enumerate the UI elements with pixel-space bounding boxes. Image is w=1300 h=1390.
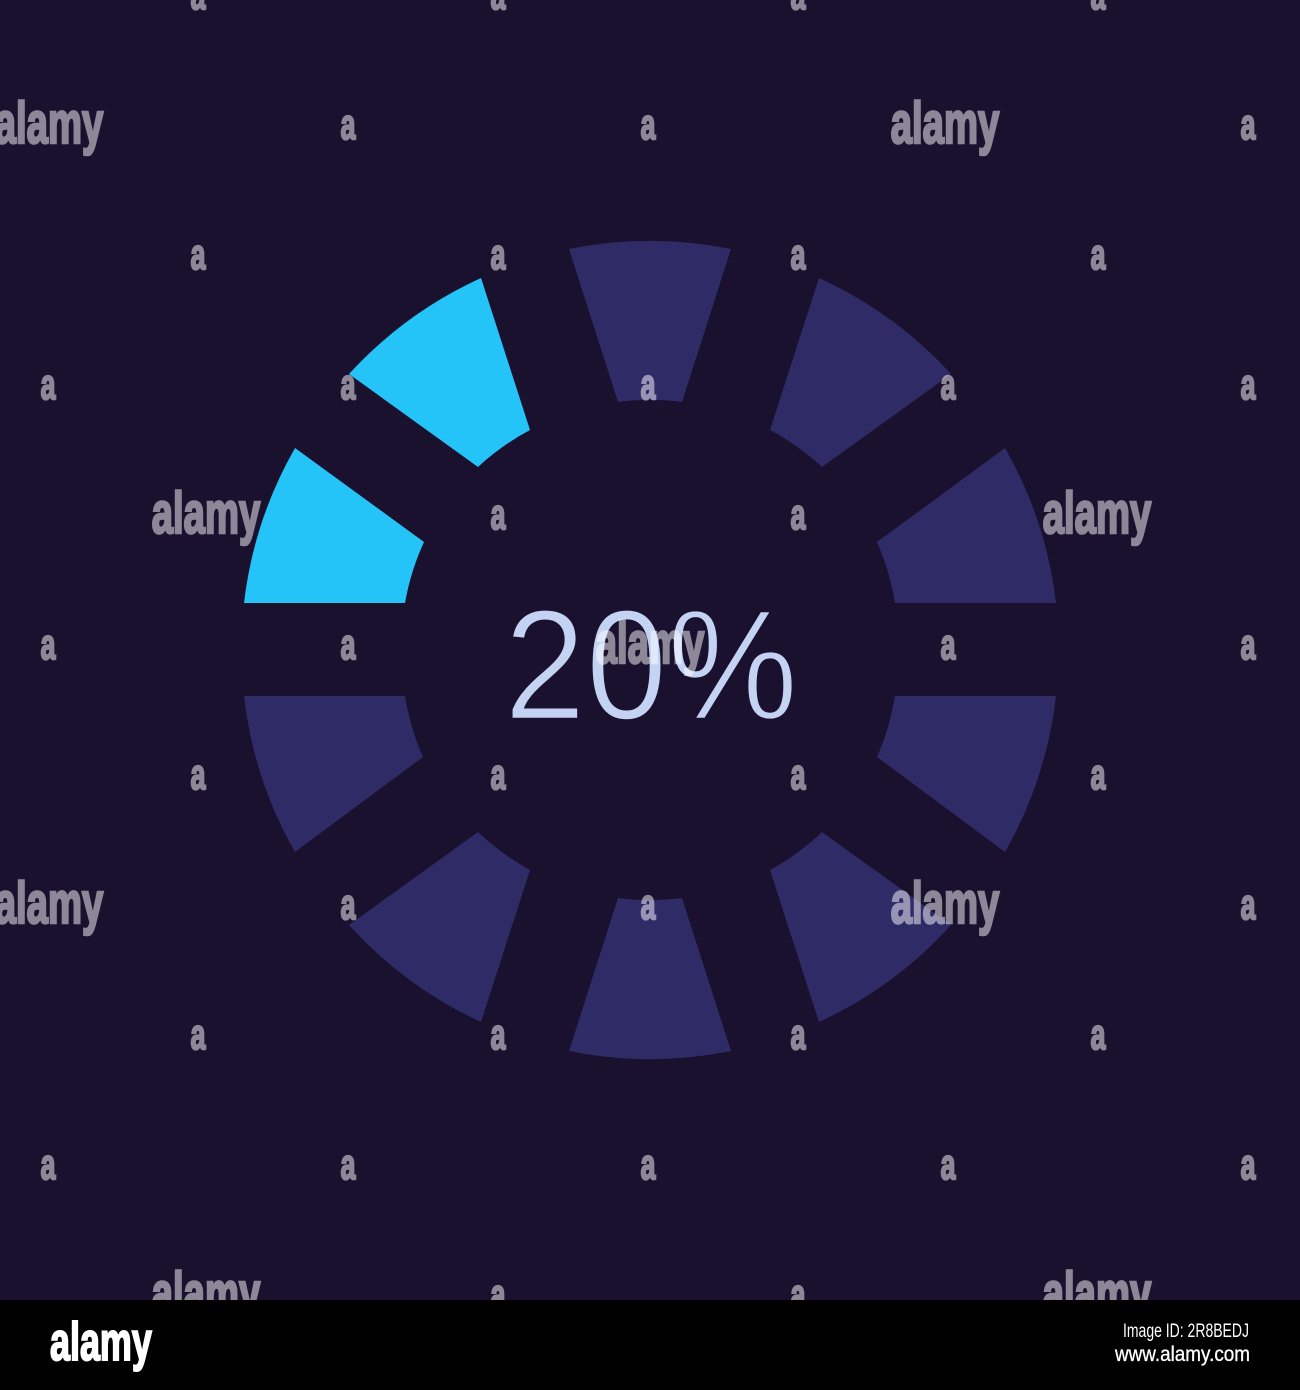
- watermark pattern: a: [1241, 361, 1256, 409]
- watermark pattern: alamy: [596, 612, 705, 676]
- watermark pattern: a: [641, 1141, 656, 1189]
- watermark pattern: alamy: [891, 872, 1000, 936]
- watermark pattern: a: [1241, 621, 1256, 669]
- website url: www.alamy.com: [1114, 1343, 1250, 1366]
- watermark pattern: a: [941, 1141, 956, 1189]
- watermark pattern: a: [41, 621, 56, 669]
- watermark pattern: a: [641, 881, 656, 929]
- segment 2: inactive upper right: [770, 278, 951, 467]
- watermark pattern: a: [491, 491, 506, 539]
- segment 4: inactive right lower: [877, 696, 1056, 852]
- watermark pattern: a: [491, 1271, 506, 1319]
- radial progress chart: [244, 241, 1056, 1059]
- watermark pattern: a: [341, 101, 356, 149]
- watermark pattern: a: [491, 1011, 506, 1059]
- segment 5: inactive lower right: [770, 832, 951, 1022]
- segment 7: inactive lower left: [349, 832, 530, 1022]
- watermark pattern: alamy: [152, 482, 261, 546]
- segment 9: active left upper: [244, 448, 424, 603]
- watermark pattern: a: [1091, 1011, 1106, 1059]
- footer bar: [0, 1300, 1300, 1390]
- watermark pattern: a: [341, 881, 356, 929]
- watermark pattern: alamy: [1043, 1262, 1152, 1326]
- watermark pattern: a: [491, 751, 506, 799]
- watermark pattern: a: [791, 751, 806, 799]
- watermark pattern: a: [641, 101, 656, 149]
- watermark pattern: a: [1091, 231, 1106, 279]
- segment 10: active upper left: [349, 278, 530, 467]
- watermark pattern: a: [941, 361, 956, 409]
- watermark pattern: alamy: [152, 1262, 261, 1326]
- watermark pattern: a: [791, 1271, 806, 1319]
- watermark pattern: a: [191, 1011, 206, 1059]
- watermark pattern: alamy: [891, 92, 1000, 156]
- watermark pattern: a: [791, 491, 806, 539]
- watermark pattern: a: [41, 1141, 56, 1189]
- watermark pattern: alamy: [1043, 482, 1152, 546]
- watermark pattern: a: [341, 1141, 356, 1189]
- watermark pattern: a: [1091, 751, 1106, 799]
- watermark pattern: a: [341, 621, 356, 669]
- watermark pattern: a: [791, 231, 806, 279]
- watermark pattern: a: [791, 1011, 806, 1059]
- footer logo: alamy: [50, 1311, 152, 1372]
- watermark pattern: a: [491, 231, 506, 279]
- watermark pattern: a: [1241, 881, 1256, 929]
- image id: Image ID: 2R8BEDJ: [1123, 1321, 1249, 1342]
- watermark pattern: a: [1241, 1141, 1256, 1189]
- watermark pattern: a: [41, 361, 56, 409]
- watermark pattern: a: [1241, 101, 1256, 149]
- center value: 20%: 20%: [504, 578, 798, 753]
- segment 3: inactive right upper: [877, 448, 1056, 603]
- watermark pattern: a: [191, 231, 206, 279]
- watermark pattern: a: [941, 621, 956, 669]
- watermark pattern: a: [641, 361, 656, 409]
- segment 8: inactive left lower: [244, 696, 423, 852]
- watermark pattern: a: [191, 751, 206, 799]
- watermark pattern: a: [341, 361, 356, 409]
- segment 6: inactive bottom: [569, 898, 731, 1059]
- segment 1: inactive top: [569, 241, 731, 402]
